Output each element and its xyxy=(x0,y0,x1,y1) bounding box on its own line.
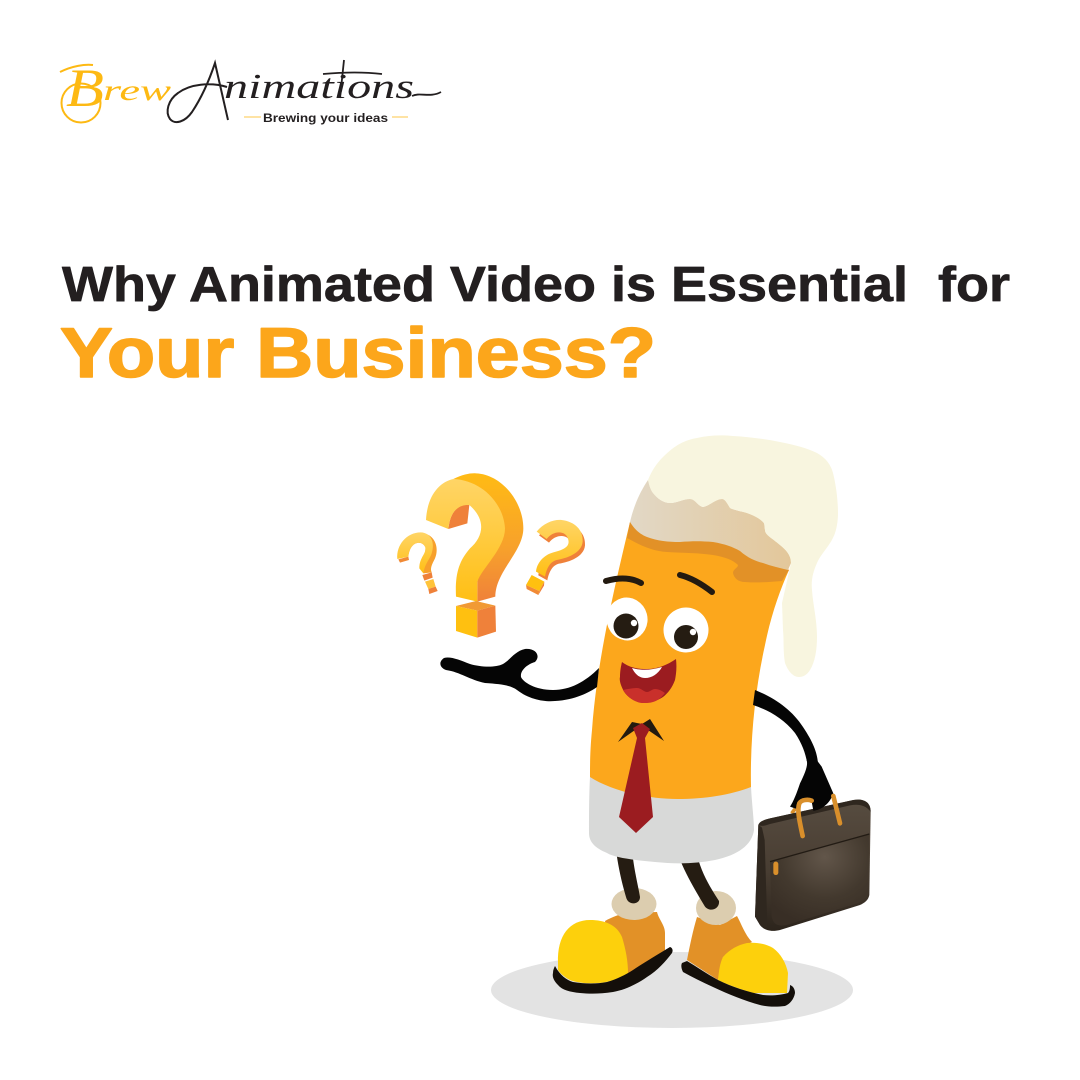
briefcase handles xyxy=(798,796,840,836)
darker beer band xyxy=(627,522,789,582)
logo wordmark: Animations: nimations xyxy=(224,67,414,106)
icon: briefcase xyxy=(755,760,871,931)
right eye xyxy=(664,608,708,652)
right arm xyxy=(753,690,818,767)
collar xyxy=(618,719,664,742)
beer body xyxy=(590,522,789,815)
briefcase body xyxy=(755,800,871,931)
right shoe xyxy=(681,916,795,1007)
briefcase clasp xyxy=(773,862,778,875)
briefcase pocket xyxy=(770,834,869,926)
title line 1: Why Animated Video is Essential for xyxy=(62,257,1010,312)
foam overlap xyxy=(648,450,800,563)
left arm and hand xyxy=(440,649,599,701)
character: beer mug mascot xyxy=(440,435,838,1007)
briefcase back handle xyxy=(792,809,795,813)
logo tagline: Brewing your ideas xyxy=(263,111,388,125)
icon: question marks xyxy=(397,473,585,638)
hand xyxy=(790,760,833,811)
small right question mark xyxy=(526,520,585,595)
eyebrows xyxy=(606,575,712,592)
briefcase seam xyxy=(770,834,869,862)
mouth xyxy=(620,659,676,703)
large question mark xyxy=(426,473,523,638)
legs and fur cuffs xyxy=(612,850,736,925)
logo wordmark: Brew: B xyxy=(66,58,104,118)
briefcase top rim xyxy=(758,800,871,826)
title xyxy=(60,257,1010,392)
logo wordmark: Animations xyxy=(168,60,441,122)
briefcase side fold xyxy=(755,825,767,927)
logo wordmark: Brew: rew xyxy=(103,74,171,107)
logo wordmark: Brew xyxy=(60,58,171,122)
foam drip and top xyxy=(648,435,838,677)
title line 2: Your Business? xyxy=(60,313,656,392)
logo xyxy=(60,58,441,125)
face xyxy=(602,575,712,703)
small left question mark xyxy=(397,532,438,594)
left eye xyxy=(602,593,652,645)
grey base xyxy=(589,777,754,863)
foam tan layer xyxy=(630,480,791,570)
left shoe xyxy=(553,912,673,994)
necktie xyxy=(619,723,653,833)
ground shadow xyxy=(491,952,853,1028)
